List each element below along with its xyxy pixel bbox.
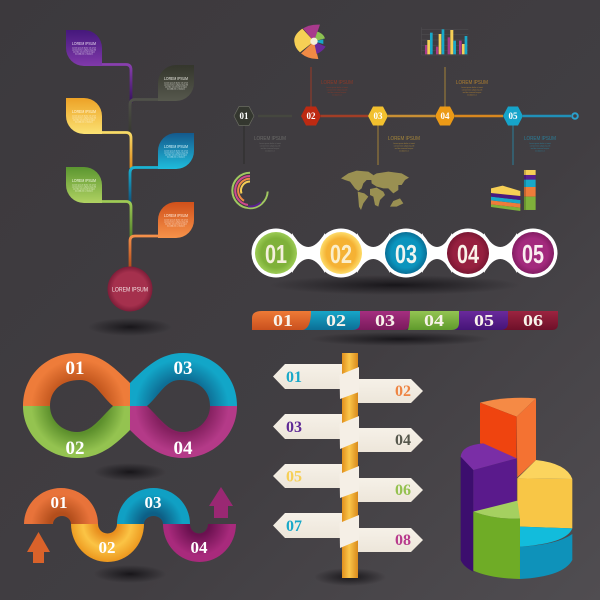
- shadow under circles: [270, 275, 520, 295]
- hexagon 02: [301, 106, 321, 126]
- hexagon 05: [503, 106, 523, 126]
- connector: orange branch: [130, 236, 158, 268]
- segment 01: [23, 353, 130, 406]
- shadow under post: [314, 568, 386, 586]
- circle 02: [316, 228, 366, 278]
- leaf: green: [66, 167, 102, 203]
- wave segment 01: 01: [50, 493, 68, 512]
- leaf: green: sed do eiusmod tempor: [73, 188, 96, 190]
- circle 01: 01: [265, 239, 287, 269]
- timeline text 05: consectetur adipiscing elit: [530, 144, 551, 148]
- wave segment 02: 02: [98, 538, 116, 557]
- hexagon 03: 03: [374, 111, 383, 121]
- timeline text 05: sed do eiusmod tempor: [531, 147, 550, 150]
- tab 02: 02: [326, 311, 346, 330]
- timeline text 02: LOREM IPSUM: [321, 80, 353, 86]
- sign 03: 03: [286, 419, 302, 436]
- leaf: yellow: incididunt ut labore: [75, 120, 93, 124]
- panel: infinity loop: [23, 353, 237, 481]
- icon: tall stack: [524, 170, 536, 210]
- leaf: green: LOREM IPSUM: [72, 178, 96, 183]
- sign 08: 08: [395, 532, 411, 549]
- leaf: green: consectetur adipiscing elit: [72, 186, 97, 188]
- connector: yellow branch: [102, 132, 131, 168]
- circle 05: [508, 228, 558, 278]
- hexagon 04: 04: [440, 111, 450, 121]
- tab 03: [350, 311, 410, 330]
- timeline text 01: LOREM IPSUM: [254, 136, 286, 142]
- tab 04: 04: [424, 311, 445, 330]
- slice: teal: [520, 527, 572, 579]
- timeline text 04: sed do eiusmod tempor: [463, 91, 482, 94]
- hexagon 04: [435, 106, 455, 126]
- panel: numbered tabs: [252, 311, 558, 346]
- leaf: green: Lorem ipsum dolor sit amet: [72, 184, 97, 186]
- sign 01: 01: [286, 369, 302, 386]
- hexagon 01: [234, 106, 254, 126]
- panel: signpost: [273, 353, 423, 586]
- timeline text 05: LOREM IPSUM: [524, 136, 556, 142]
- leaf: yellow: consectetur adipiscing elit: [72, 116, 97, 120]
- tab 01: [252, 311, 311, 330]
- leaf: blue: [158, 133, 194, 169]
- sign 02: 02: [395, 383, 411, 400]
- arrow: magenta up: [209, 487, 233, 518]
- leaf: yellow: [66, 98, 102, 134]
- circle 04: [444, 228, 492, 278]
- timeline text 02: Lorem ipsum dolor sit amet: [326, 86, 348, 89]
- post: [342, 353, 358, 578]
- tab 06: 06: [523, 311, 543, 330]
- icon: stacked layers: [491, 186, 520, 211]
- circle 02: 02: [330, 239, 352, 269]
- slice: purple: [461, 443, 517, 572]
- panel: leaf tree diagram: [66, 30, 194, 336]
- leaf: blue: LOREM IPSUM: [164, 144, 188, 149]
- slice: orange: [480, 398, 536, 477]
- leaf: orange: Lorem ipsum dolor sit amet: [164, 218, 189, 222]
- sign 01: [273, 364, 342, 389]
- segment 01: 01: [66, 358, 84, 379]
- root circle: LOREM IPSUM: [112, 286, 148, 294]
- panel: 3D segmented cylinder chart: [461, 398, 572, 579]
- timeline text 02: [321, 80, 353, 96]
- wave segment 04: 04: [190, 538, 208, 557]
- timeline text 03: consectetur adipiscing elit: [394, 144, 415, 148]
- timeline text 04: Lorem ipsum dolor sit amet: [461, 86, 483, 89]
- timeline text 05: incididunt ut: [535, 150, 545, 152]
- leaf: dark: LOREM IPSUM: [164, 76, 188, 81]
- circle 04: 04: [457, 239, 479, 269]
- hexagon 03: [368, 106, 388, 126]
- tab 03: 03: [375, 311, 395, 330]
- tab 02: [303, 311, 360, 330]
- shadow under infinity: [94, 463, 166, 481]
- timeline text 01: Lorem ipsum dolor sit amet: [259, 142, 281, 145]
- circle 03: 03: [395, 239, 417, 269]
- timeline text 04: LOREM IPSUM: [456, 80, 488, 86]
- timeline text 01: [254, 136, 286, 152]
- leaf: orange: [158, 202, 194, 238]
- shadow under wave: [94, 565, 166, 583]
- circle 05: 05: [522, 239, 544, 269]
- timeline text 02: sed do eiusmod tempor: [328, 91, 347, 94]
- white chain connector: [292, 233, 517, 273]
- connector: dark branch: [130, 100, 158, 135]
- leaf: blue: incididunt ut labore: [167, 156, 185, 158]
- leaf: orange: LOREM IPSUM: [164, 213, 188, 218]
- tab 04: [408, 311, 459, 330]
- icon: bar chart: [422, 27, 468, 55]
- segment 03: 03: [174, 358, 192, 379]
- sign 07: [273, 513, 342, 538]
- leaf: purple: sed do eiusmod tempor: [73, 50, 96, 54]
- sign 03: [273, 414, 342, 439]
- leaf: blue: sed do eiusmod tempor: [165, 154, 188, 156]
- wave segment 03: 03: [144, 493, 162, 512]
- leaf: dark: incididunt ut labore: [167, 88, 185, 90]
- panel: timeline: [232, 25, 578, 211]
- sign 05: [273, 464, 342, 488]
- leaf: yellow: sed do eiusmod tempor: [73, 118, 96, 122]
- timeline text 01: sed do eiusmod tempor: [261, 147, 280, 150]
- leaf: dark: sed do eiusmod tempor: [165, 86, 188, 88]
- timeline text 04: consectetur adipiscing elit: [462, 88, 483, 92]
- timeline text 02: incididunt ut: [332, 94, 342, 96]
- connector: blue branch: [130, 168, 158, 203]
- sign 08: [358, 528, 423, 552]
- hexagon 01: 01: [240, 111, 249, 121]
- segment 04: 04: [174, 438, 193, 459]
- leaf: yellow: Lorem ipsum dolor sit amet: [72, 114, 97, 118]
- arrow: orange up: [27, 532, 50, 563]
- leaf: purple: consectetur adipiscing elit: [72, 48, 97, 52]
- icon: radial arc chart: [232, 173, 268, 208]
- segment 02: [23, 406, 130, 459]
- timeline text 04: [456, 80, 488, 96]
- leaf: blue: consectetur adipiscing elit: [164, 152, 189, 154]
- sign 04: 04: [395, 432, 411, 449]
- timeline line segments: [244, 67, 571, 165]
- sign 02: [358, 379, 423, 403]
- sign 07: 07: [286, 518, 302, 535]
- leaf: dark: Lorem ipsum dolor sit amet: [164, 82, 189, 84]
- sign 06: 06: [395, 482, 411, 499]
- panel: numbered circles: [252, 228, 558, 295]
- wave segment 04: [163, 524, 236, 562]
- tab 06: [500, 311, 558, 330]
- leaf: dark: consectetur adipiscing elit: [164, 84, 189, 86]
- shadow under root: [88, 318, 172, 336]
- leaf: purple: LOREM IPSUM: [72, 41, 96, 46]
- timeline text 02: consectetur adipiscing elit: [327, 88, 348, 92]
- segment 02: 02: [66, 438, 84, 459]
- wave segment 01: [24, 488, 98, 524]
- sign 05: 05: [286, 468, 302, 486]
- circle 01: [252, 228, 300, 278]
- wave segment 02: [71, 524, 144, 562]
- leaf: orange: incididunt ut labore: [167, 224, 185, 228]
- timeline text 03: incididunt ut: [399, 150, 409, 152]
- root circle: [108, 266, 152, 312]
- tab 05: 05: [474, 311, 494, 330]
- leaf: purple: Lorem ipsum dolor sit amet: [72, 46, 97, 50]
- shadow under tabs: [310, 332, 490, 346]
- leaf: dark: [158, 65, 194, 101]
- leaf: blue: Lorem ipsum dolor sit amet: [164, 150, 189, 152]
- ribbon wraps: [340, 367, 359, 548]
- segment 03: [130, 353, 237, 406]
- slice: green: [473, 501, 520, 579]
- circle 03: [382, 228, 430, 278]
- timeline text 03: Lorem ipsum dolor sit amet: [393, 142, 415, 145]
- timeline text 05: Lorem ipsum dolor sit amet: [529, 142, 551, 145]
- hexagon 05: 05: [508, 111, 518, 121]
- icon: pie chart: [294, 25, 326, 59]
- leaf: green: incididunt ut labore: [75, 190, 93, 192]
- leaf: orange: consectetur adipiscing elit: [164, 220, 189, 224]
- tab 05: [450, 311, 508, 330]
- timeline text 05: [524, 136, 556, 152]
- leaf: purple: [66, 30, 102, 66]
- wave segment 03: [117, 488, 190, 524]
- timeline text 03: sed do eiusmod tempor: [395, 147, 414, 150]
- panel: wave: [24, 487, 236, 583]
- hexagon 02: 02: [306, 111, 316, 121]
- sign 06: [358, 478, 423, 502]
- connector: green branch: [102, 202, 131, 238]
- timeline text 04: incididunt ut: [467, 94, 477, 96]
- leaf: orange: sed do eiusmod tempor: [165, 222, 188, 226]
- connector: purple branch: [102, 64, 131, 103]
- timeline text 01: consectetur adipiscing elit: [260, 144, 281, 148]
- leaf: purple: incididunt ut labore: [75, 52, 93, 56]
- sign 04: [358, 428, 423, 452]
- slice: yellow: [517, 460, 572, 528]
- timeline text 01: incididunt ut: [265, 150, 275, 152]
- icon: world map: [341, 171, 409, 210]
- timeline text 03: [388, 136, 420, 152]
- timeline end marker: [572, 113, 578, 119]
- segment 04: [130, 406, 237, 459]
- leaf: yellow: LOREM IPSUM: [72, 109, 96, 114]
- tab 01: 01: [273, 311, 293, 330]
- timeline text 03: LOREM IPSUM: [388, 136, 420, 142]
